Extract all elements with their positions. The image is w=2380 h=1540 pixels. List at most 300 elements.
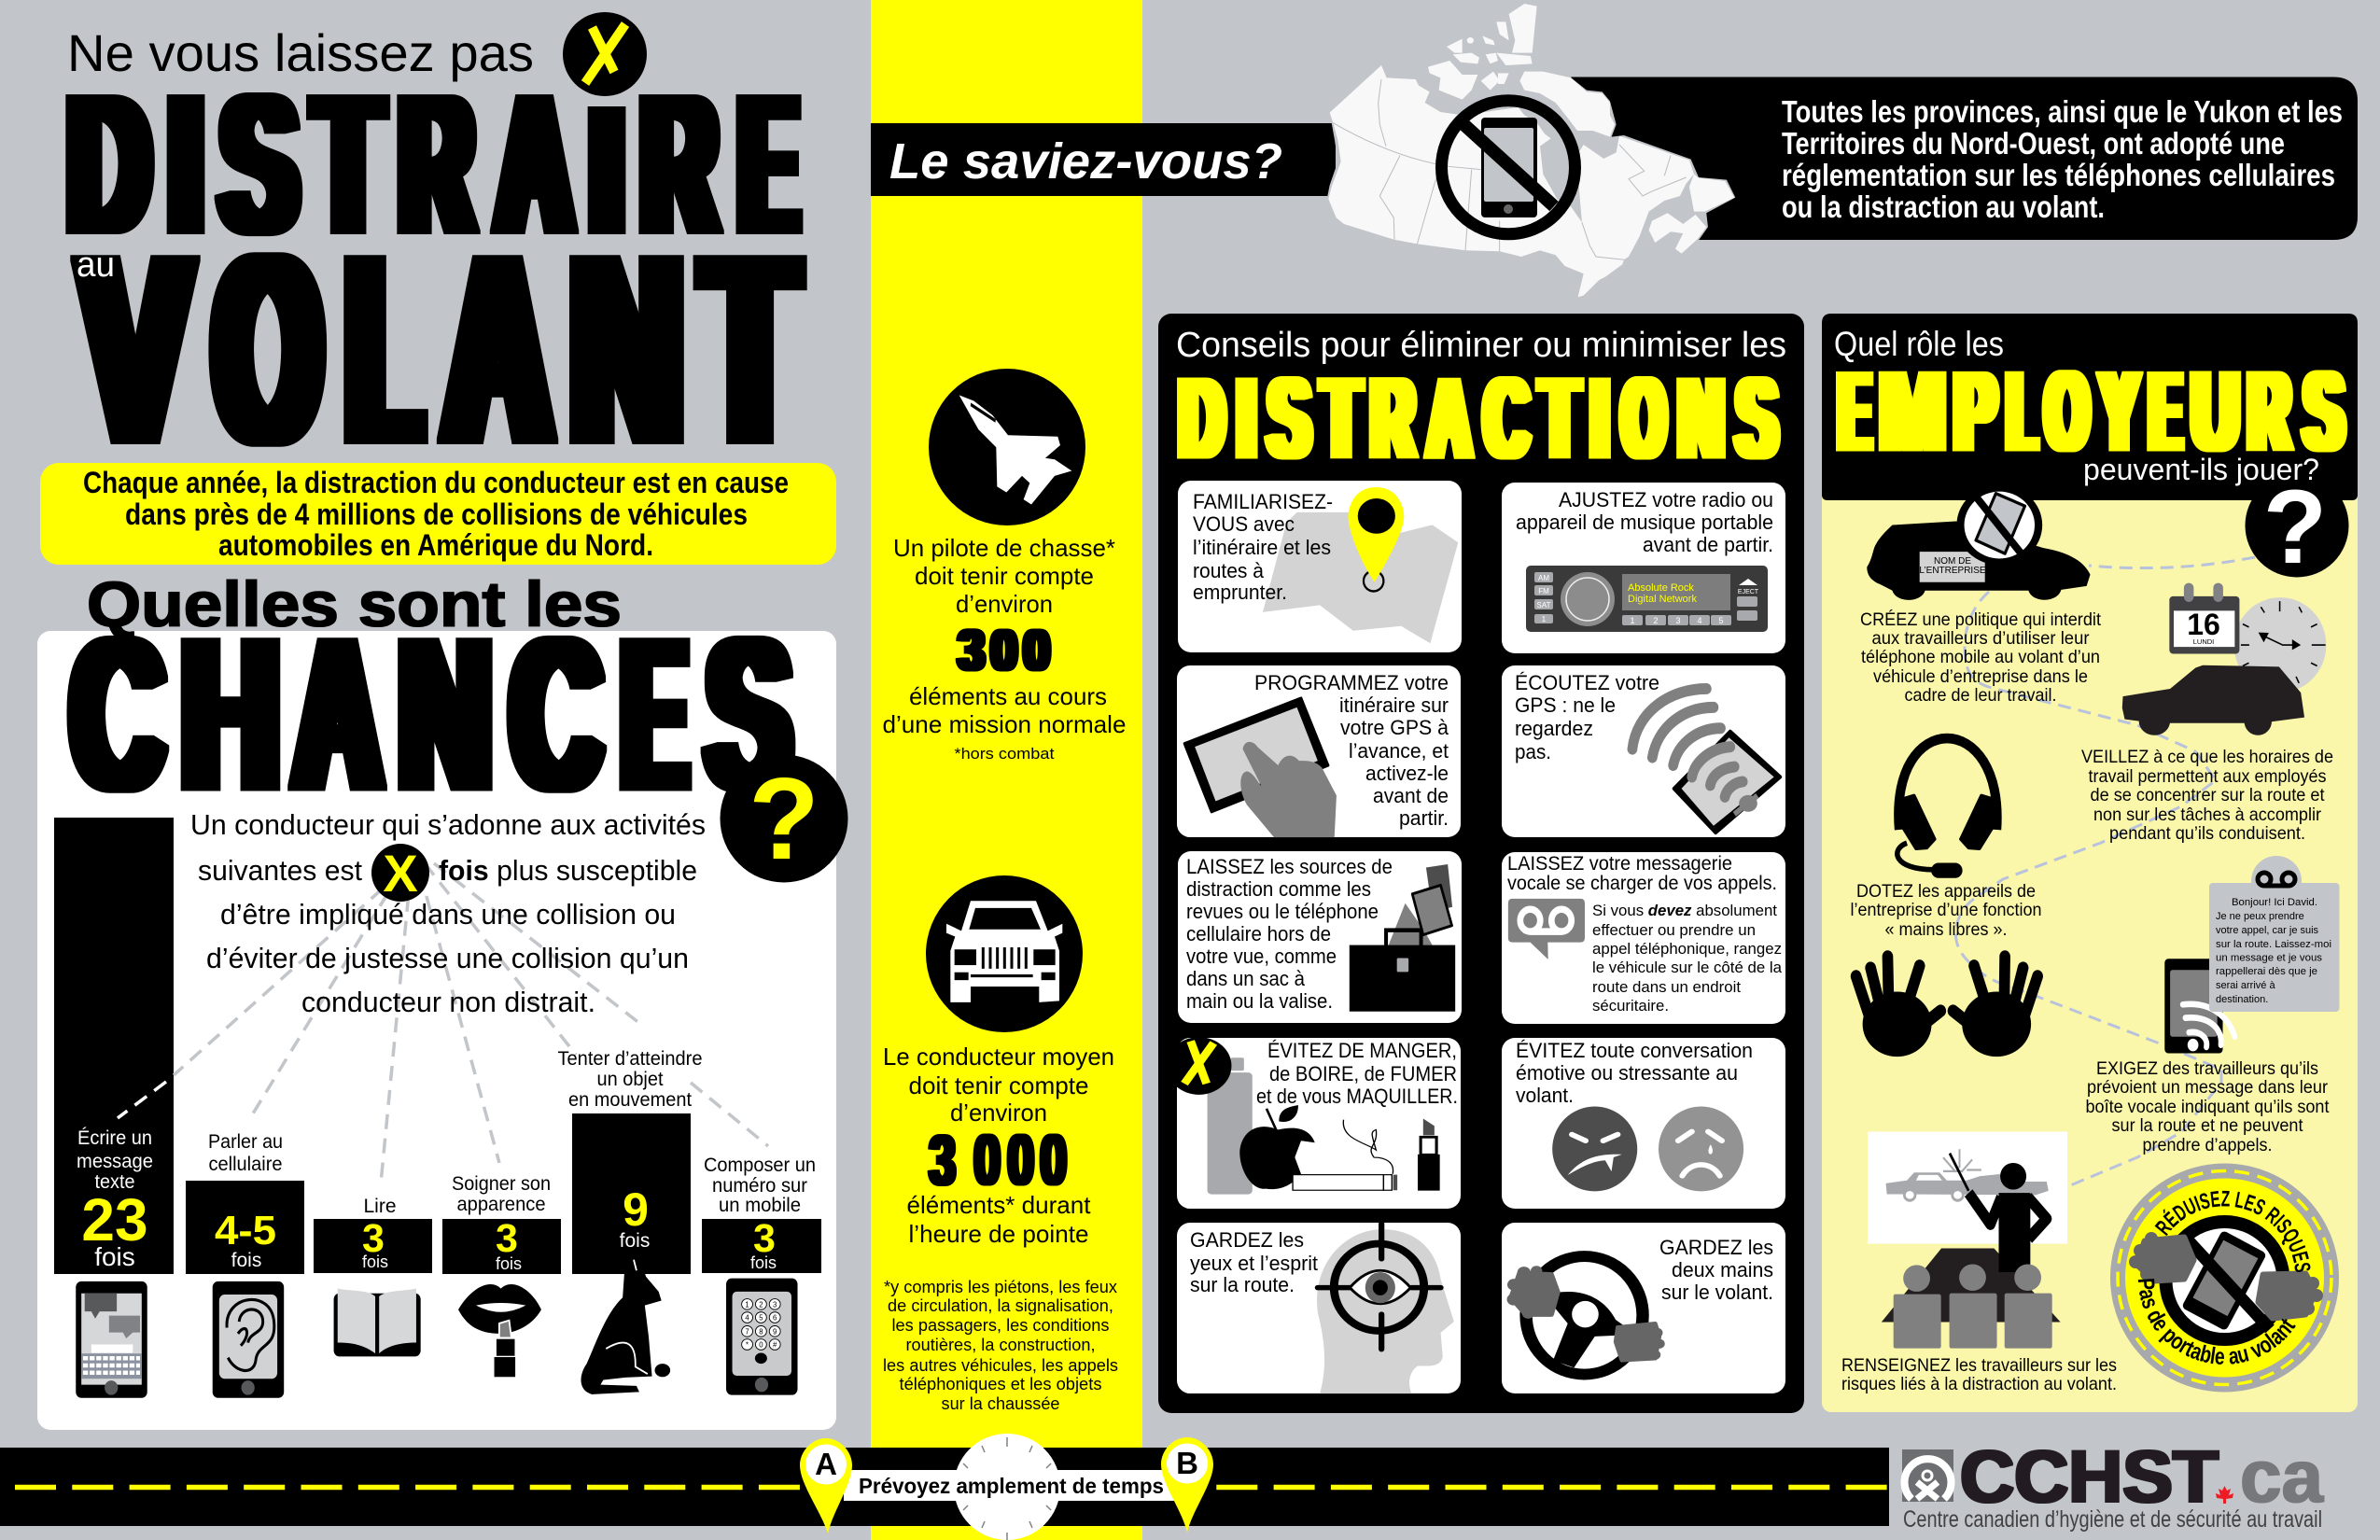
- heading: DISTRACTIONS: I: [1238, 356, 1255, 483]
- icon: no phone symbol: [1441, 101, 1575, 234]
- yellow centre column: [871, 0, 1142, 1540]
- icon: company car: L’ENTREPRISE: [1919, 566, 1986, 576]
- title word: DISTRAIRE: D: [68, 53, 149, 274]
- card: laissez sources: cellulaire hors de: [1186, 922, 1331, 945]
- banner right: [1571, 77, 2358, 240]
- heading: DISTRACTIONS: R: [1371, 356, 1414, 483]
- title word: VOLANT: N: [572, 200, 681, 498]
- heading: EMPLOYEURS: Y: [2101, 347, 2138, 474]
- title word: VOLANT: [82, 200, 795, 498]
- banner left: [871, 123, 1336, 196]
- icon: company car: [1867, 485, 2091, 600]
- heading: Quelles sont les: Quelles sont les: [87, 568, 622, 640]
- label: grooming: [452, 1173, 551, 1273]
- icon: car radio: AM: [1538, 574, 1549, 582]
- bar icons: [76, 1255, 798, 1398]
- road centre dashes: [15, 1485, 1889, 1490]
- card: programmez: [1177, 665, 1461, 837]
- text: renseignez: [1841, 1355, 2117, 1394]
- label: dialing: Composer un: [704, 1155, 816, 1176]
- driver text: Le conducteur moyen: [883, 1043, 1114, 1071]
- icon: company car: NOM DE: [1934, 556, 1971, 567]
- card: evitez manger: et de vous MAQUILLER.: [1256, 1085, 1458, 1108]
- title word: VOLANT: A: [446, 200, 549, 498]
- text: creez: aux travailleurs d’utiliser leur: [1872, 628, 2090, 649]
- heading: EMPLOYEURS: O: [2046, 347, 2088, 474]
- text: veillez: travail permettent aux employés: [2089, 766, 2327, 787]
- icon: keypad phone: 1: [745, 1300, 749, 1309]
- heading: CHANCES: H: [182, 594, 279, 834]
- driver text: [883, 1043, 1114, 1248]
- label: reading: [362, 1196, 397, 1271]
- heading: DISTRACTIONS: T: [1541, 356, 1578, 483]
- icon: phone with signal: [2164, 959, 2234, 1054]
- icon: dog: [581, 1255, 670, 1394]
- footnote: téléphoniques et les objets: [900, 1375, 1101, 1393]
- heading: EMPLOYEURS: [1840, 347, 2344, 474]
- card: ecoutez: GPS : ne le: [1515, 693, 1616, 717]
- card: familiarisez: FAMILIARISEZ-: [1193, 490, 1333, 513]
- text: dotez: DOTEZ les appareils de: [1856, 881, 2036, 902]
- heading: EMPLOYEURS: U: [2191, 347, 2238, 474]
- header background: [1822, 314, 2358, 500]
- text: exigez: [2085, 1058, 2330, 1155]
- footnote: *y compris les piétons, les feux: [884, 1278, 1117, 1296]
- card: gardez mains: [1502, 1223, 1785, 1393]
- gap above the letter I: [581, 82, 633, 106]
- icon: keypad phone: [726, 1279, 798, 1395]
- intro paragraph: suivantes est: [198, 854, 362, 887]
- heading: EMPLOYEURS: E: [2150, 347, 2180, 474]
- plan ahead label: Prévoyez amplement de temps: [859, 1474, 1164, 1498]
- icon: question mark: ?: [2263, 469, 2327, 585]
- heading: EMPLOYEURS: E: [1840, 347, 1869, 474]
- title word: VOLANT: V: [82, 200, 189, 498]
- icon: pin B: B: [1176, 1446, 1198, 1480]
- card: evitez manger: de BOIRE, de FUMER: [1269, 1062, 1457, 1085]
- road surface: [0, 1448, 1889, 1526]
- number: 3 000: 0: [1008, 1121, 1034, 1200]
- number: 300: 0: [1023, 619, 1050, 683]
- number: 3 000: 0: [974, 1121, 1001, 1200]
- pilot text: *hors combat: [954, 745, 1055, 763]
- heading: Quel role les: Quel rôle les: [1834, 325, 2004, 363]
- text: exigez: sur la route et ne peuvent: [2111, 1115, 2303, 1136]
- card: gardez mains: GARDEZ les: [1659, 1236, 1773, 1259]
- icon: two hands: [1856, 957, 2037, 1057]
- text: exigez: EXIGEZ des travailleurs qu’ils: [2096, 1058, 2318, 1079]
- card: familiarisez: emprunter.: [1193, 581, 1287, 604]
- panel background: [1158, 314, 1804, 1413]
- label: reading: Lire: [363, 1196, 397, 1217]
- title word: VOLANT: L: [349, 200, 419, 498]
- heading: DISTRACTIONS: [1180, 356, 1777, 483]
- card: laissez sources: main ou la valise.: [1186, 989, 1333, 1013]
- card: laissez messagerie: LAISSEZ votre messagerie: [1507, 853, 1732, 875]
- heading: Le saviez-vous?: Le saviez-vous?: [889, 133, 1282, 189]
- panel: employers: [1822, 314, 2358, 1412]
- number: 300: [958, 619, 1050, 683]
- card: evitez conversation: ÉVITEZ toute conversation: [1516, 1039, 1753, 1062]
- road band: [0, 1434, 1889, 1540]
- heading: EMPLOYEURS: S: [2304, 347, 2344, 474]
- label: texting: message: [77, 1151, 153, 1172]
- number: 3 000: 3: [930, 1121, 956, 1200]
- callout: yearly collisions: Chaque année, la distraction du conducteur est en cause: [83, 466, 789, 499]
- heading: DISTRACTIONS: O: [1622, 356, 1665, 483]
- heading: EMPLOYEURS: R: [2248, 347, 2289, 474]
- icon: GPS audio waves: [1632, 689, 1780, 833]
- number: 3 000: [930, 1121, 1067, 1200]
- text: creez: [1860, 609, 2102, 706]
- footnote: routières, la construction,: [905, 1336, 1096, 1354]
- voicemail message bubble: destination.: [2216, 994, 2268, 1005]
- card: ajustez: avant de partir.: [1643, 533, 1773, 556]
- map landmass: [1328, 4, 1734, 297]
- card: familiarisez: [1178, 481, 1462, 652]
- footnote: les autres véhicules, les appels: [883, 1356, 1118, 1375]
- card: laissez messagerie: appel téléphonique, rangez: [1592, 940, 1782, 958]
- icon: pin A: [800, 1438, 852, 1533]
- footnote: les passagers, les conditions: [892, 1316, 1109, 1335]
- card: familiarisez: routes à: [1193, 559, 1265, 582]
- number: 3 000: 0: [1040, 1121, 1067, 1200]
- card: gardez mains: sur le volant.: [1661, 1281, 1773, 1304]
- card: evitez conversation: émotive ou stressante au: [1516, 1061, 1738, 1085]
- label: grooming: fois: [496, 1254, 522, 1273]
- text: exigez: prévoient un message dans leur: [2087, 1077, 2328, 1098]
- icon: keypad phone: 5: [759, 1313, 763, 1323]
- label: texting: [77, 1127, 153, 1271]
- card: gardez yeux: sur la route.: [1190, 1273, 1295, 1296]
- icon: steering wheel and fists: [1507, 1256, 1665, 1375]
- icon: car radio: Digital Network: [1628, 594, 1697, 605]
- text: E: [741, 53, 796, 274]
- icon: keypad phone: 9: [773, 1327, 777, 1337]
- icon: car radio: FM: [1538, 587, 1549, 595]
- icon: texting phone: [76, 1281, 147, 1398]
- card: laissez sources: dans un sac à: [1186, 967, 1306, 990]
- title word: VOLANT: O: [217, 200, 319, 498]
- logo icon: [1902, 1449, 1953, 1502]
- heading: CHANCES: C: [72, 594, 162, 834]
- label: grooming: Soigner son: [452, 1173, 551, 1195]
- card: laissez sources: LAISSEZ les sources de: [1186, 855, 1393, 878]
- pilot text: éléments au cours: [909, 682, 1107, 710]
- card: ecoutez: regardez: [1515, 717, 1593, 740]
- voicemail message bubble: [2209, 856, 2339, 1012]
- icon: X inline: [371, 844, 429, 903]
- label: grooming: apparence: [457, 1194, 545, 1215]
- icon: maple leaf: [2216, 1486, 2233, 1504]
- card: laissez messagerie: effectuer ou prendre un: [1592, 921, 1756, 939]
- label: texting: fois: [94, 1242, 135, 1271]
- heading: DISTRACTIONS: A: [1428, 356, 1471, 483]
- driver text: l’heure de pointe: [909, 1220, 1088, 1248]
- card: programmez: l’avance, et: [1349, 739, 1449, 763]
- pilot text: Un pilote de chasse*: [893, 534, 1115, 562]
- card: familiarisez: l’itinéraire et les: [1193, 536, 1331, 559]
- card: familiarisez: VOUS avec: [1193, 512, 1295, 536]
- card: laissez messagerie: le véhicule sur le côté de la: [1592, 959, 1783, 976]
- card: evitez conversation: volant.: [1516, 1084, 1574, 1107]
- legislation text: ou la distraction au volant.: [1782, 189, 2105, 224]
- callout: yearly collisions: [40, 463, 836, 565]
- pilot text: d’environ: [956, 590, 1053, 618]
- icon: angry and sad faces: [1552, 1106, 1743, 1191]
- badge: reduisez les risques: [2110, 1163, 2339, 1393]
- heading: CHANCES: S: [707, 594, 791, 834]
- icon: fighter jet: [929, 369, 1085, 525]
- legislation text: Territoires du Nord-Ouest, ont adopté une: [1782, 126, 2285, 161]
- label: cell phone: 4-5: [215, 1208, 276, 1253]
- icon: keypad phone: 7: [745, 1327, 749, 1337]
- card: laissez messagerie: sécuritaire.: [1592, 997, 1669, 1015]
- heading: DISTRACTIONS: S: [1268, 356, 1310, 483]
- intro paragraph: d’être impliqué dans une collision ou: [220, 898, 676, 931]
- icon: head with target eye: [1317, 1224, 1454, 1393]
- card: gardez yeux: GARDEZ les: [1190, 1228, 1304, 1252]
- panel: le saviez-vous banner: [871, 4, 2358, 297]
- panel: pilot vs driver: [883, 369, 1126, 1413]
- text: creez: CRÉEZ une politique qui interdit: [1860, 609, 2102, 630]
- title word: DISTRAIRE: [68, 53, 796, 274]
- title word: DISTRAIRE: R: [400, 53, 472, 274]
- card: laissez messagerie: [1502, 852, 1785, 1024]
- icon: ear phone: [213, 1281, 284, 1398]
- text: dotez: l’entreprise d’une fonction: [1850, 900, 2042, 920]
- icon: car radio: 4: [1697, 616, 1702, 625]
- pilot text: d’une mission normale: [883, 710, 1126, 738]
- badge: reduisez les risques: Pas de portable au volant: [2137, 1279, 2296, 1365]
- icon: clock face: [954, 1434, 1060, 1540]
- number: 300: 3: [958, 619, 985, 683]
- card: ecoutez: [1502, 665, 1785, 837]
- label: dialing: 3: [753, 1216, 776, 1261]
- footnote: sur la chaussée: [941, 1394, 1060, 1413]
- icon: briefcase with phone: [1350, 864, 1455, 1012]
- title line: Ne vous laissez pas: Ne vous laissez pas: [67, 23, 534, 82]
- icon: keypad phone: #: [773, 1340, 777, 1350]
- heading: CHANCES: [72, 594, 791, 834]
- label: texting: texte: [95, 1171, 134, 1193]
- heading: DISTRACTIONS: D: [1180, 356, 1225, 483]
- icon: car radio: 2: [1653, 616, 1659, 625]
- intro paragraph: fois plus susceptible: [439, 854, 697, 887]
- card: laissez sources: [1178, 851, 1462, 1023]
- voicemail message bubble: Bonjour! Ici David.: [2232, 897, 2317, 908]
- card: laissez messagerie: vocale se charger de vos appels.: [1507, 873, 1777, 894]
- heading: EMPLOYEURS: M: [1880, 347, 1945, 474]
- icon: car front: [926, 875, 1083, 1032]
- text: renseignez: risques liés à la distraction au volant.: [1841, 1374, 2117, 1394]
- legislation text: [1782, 94, 2343, 224]
- heading: CHANCES: E: [623, 594, 685, 834]
- card: laissez sources: distraction comme les: [1186, 877, 1371, 901]
- icon: food, smoke and makeup: [1167, 1037, 1440, 1195]
- label: grooming: 3: [496, 1216, 518, 1261]
- card: programmez: activez-le: [1365, 762, 1449, 785]
- text: veillez: de se concentrer sur la route et: [2091, 785, 2325, 805]
- label: reaching: en mouvement: [568, 1089, 692, 1111]
- map coastal fringe: [1327, 77, 1735, 268]
- icon: clock, calendar and SUV: [2122, 583, 2326, 735]
- icon: car radio: [1526, 566, 1768, 632]
- heading line: Conseils pour éliminer ou minimiser les: [1176, 326, 1786, 365]
- text: veillez: [2081, 747, 2333, 844]
- icon: question mark circle: ?: [749, 755, 819, 884]
- label: cell phone: [208, 1131, 283, 1271]
- icon: keypad phone: 8: [759, 1327, 763, 1337]
- label: dialing: [704, 1155, 816, 1272]
- icon: keypad phone: 4: [745, 1313, 749, 1323]
- icon: car radio: 5: [1718, 616, 1724, 625]
- number: 300: 0: [991, 619, 1017, 683]
- icon: pin A: A: [815, 1447, 837, 1481]
- dashed route lines: [1955, 557, 2255, 1186]
- label: cell phone: cellulaire: [209, 1154, 282, 1175]
- logo: CCHST: [1902, 1435, 2324, 1533]
- icon: car radio: 1: [1542, 615, 1547, 623]
- footnote: [883, 1278, 1118, 1413]
- intro paragraph: [190, 808, 706, 1018]
- driver text: d’environ: [950, 1099, 1047, 1127]
- text: creez: cadre de leur travail.: [1904, 685, 2057, 706]
- icon: book: [334, 1289, 421, 1356]
- title block: [67, 12, 796, 498]
- title word: DISTRAIRE: I: [590, 53, 623, 274]
- text: veillez: pendant qu’ils conduisent.: [2109, 823, 2305, 844]
- callout: yearly collisions: automobiles en Amérique du Nord.: [218, 528, 653, 562]
- text: veillez: non sur les tâches à accomplir: [2093, 805, 2321, 825]
- icon: car radio: SAT: [1537, 601, 1551, 609]
- card: ecoutez: ÉCOUTEZ votre: [1515, 671, 1659, 694]
- text: creez: véhicule d’entreprise dans le: [1873, 666, 2088, 687]
- logo wordmark: CCHST: [1960, 1435, 2219, 1518]
- text: exigez: prendre d’appels.: [2143, 1135, 2272, 1155]
- icon: keypad phone: 0: [759, 1340, 763, 1350]
- text: dotez: [1850, 881, 2042, 940]
- panel: distractions: [1158, 314, 1804, 1413]
- title word: DISTRAIRE: R: [642, 53, 716, 274]
- logo suffix: ca: [2240, 1435, 2324, 1518]
- icon: X circle: [563, 12, 647, 96]
- title word: DISTRAIRE: T: [315, 53, 381, 274]
- heading: CHANCES: C: [511, 594, 600, 834]
- panel background: [37, 631, 836, 1430]
- card: gardez yeux: [1177, 1223, 1461, 1393]
- card: programmez: itinéraire sur: [1339, 693, 1449, 717]
- icon: keypad phone: *: [746, 1340, 749, 1350]
- card: ajustez: [1502, 483, 1785, 653]
- icon: pin B: [1161, 1437, 1213, 1533]
- title word: DISTRAIRE: A: [497, 53, 571, 274]
- card: ecoutez: pas.: [1515, 740, 1551, 763]
- title word: DISTRAIRE: I: [169, 53, 203, 274]
- intro paragraph: Un conducteur qui s’adonne aux activités: [190, 808, 706, 841]
- card: programmez: partir.: [1399, 806, 1449, 830]
- icon: question mark: [2246, 469, 2348, 585]
- title word: VOLANT: T: [705, 200, 795, 498]
- card: programmez: votre GPS à: [1340, 716, 1449, 739]
- icon: training session: [1868, 1131, 2067, 1349]
- text: creez: téléphone mobile au volant d’un: [1861, 647, 2100, 667]
- label: reading: fois: [362, 1253, 388, 1271]
- card: laissez messagerie: route dans un endroit: [1592, 978, 1741, 996]
- heading: peuvent-ils jouer: peuvent-ils jouer?: [2083, 453, 2319, 486]
- voicemail message bubble: rappellerai dès que je: [2216, 966, 2317, 977]
- label: reaching: [558, 1048, 702, 1252]
- card: evitez manger: ÉVITEZ DE MANGER,: [1267, 1039, 1457, 1062]
- title word: au: au: [77, 245, 115, 285]
- heading: EMPLOYEURS: L: [2009, 347, 2036, 474]
- voicemail message bubble: Je ne peux prendre: [2216, 911, 2304, 922]
- intro paragraph: conducteur non distrait.: [301, 986, 595, 1018]
- icon: car radio: Absolute Rock: [1628, 582, 1694, 594]
- card: gardez mains: deux mains: [1672, 1258, 1773, 1281]
- icon: car radio: 3: [1675, 616, 1681, 625]
- heading: CHANCES: A: [295, 594, 380, 834]
- title word: DISTRAIRE: S: [221, 53, 297, 274]
- icon: map of Canada: [1327, 4, 1735, 297]
- text: exigez: boîte vocale indiquant qu’ils sont: [2085, 1097, 2330, 1117]
- icon: headset: [1897, 738, 1998, 878]
- label: dialing: numéro sur: [712, 1175, 807, 1197]
- icon: car radio: 1: [1630, 616, 1635, 625]
- dashed connector lines: [118, 863, 768, 1183]
- label: texting: 23: [81, 1186, 148, 1253]
- card: programmez: avant de: [1373, 784, 1449, 807]
- icon: voicemail bubble: [1508, 899, 1585, 959]
- intro paragraph: d’éviter de justesse une collision qu’un: [206, 942, 689, 974]
- driver text: éléments* durant: [907, 1191, 1091, 1219]
- text: dotez: « mains libres ».: [1885, 919, 2007, 940]
- heading: EMPLOYEURS: P: [1954, 347, 1995, 474]
- pilot text: [883, 534, 1126, 763]
- card: evitez manger: [1167, 1037, 1461, 1209]
- callout: yearly collisions: dans près de 4 millions de collisions de véhicules: [125, 497, 748, 531]
- bar chart: [54, 818, 821, 1274]
- bar labels: [77, 1048, 816, 1273]
- pilot text: doit tenir compte: [915, 562, 1094, 590]
- footnote: de circulation, la signalisation,: [888, 1296, 1113, 1315]
- label: texting: Écrire un: [77, 1127, 152, 1149]
- card: evitez conversation: [1502, 1038, 1785, 1209]
- voicemail message bubble: votre appel, car je suis: [2216, 925, 2319, 936]
- text: veillez: VEILLEZ à ce que les horaires de: [2081, 747, 2333, 767]
- icon: keypad phone: 3: [773, 1300, 777, 1309]
- icon: keypad phone: 2: [759, 1300, 763, 1309]
- heading: DISTRACTIONS: N: [1679, 356, 1723, 483]
- label: cell phone: Parler au: [208, 1131, 283, 1153]
- label: dialing: un mobile: [719, 1195, 801, 1216]
- label: reaching: 9: [623, 1183, 649, 1236]
- label: reaching: un objet: [597, 1069, 664, 1090]
- heading: DISTRACTIONS: T: [1323, 356, 1360, 483]
- icon: keypad phone: 6: [773, 1313, 777, 1323]
- heading: DISTRACTIONS: I: [1591, 356, 1608, 483]
- voicemail message bubble: sur la route. Laissez-moi: [2216, 939, 2331, 950]
- card: ajustez: appareil de musique portable: [1516, 511, 1773, 534]
- icon: clock, calendar and SUV: LUNDI: [2193, 637, 2214, 646]
- driver text: doit tenir compte: [909, 1071, 1088, 1099]
- heading: CHANCES: N: [399, 594, 491, 834]
- icon: lips and lipstick: [458, 1284, 541, 1377]
- card: laissez sources: votre vue, comme: [1186, 945, 1337, 968]
- label: dialing: fois: [750, 1253, 777, 1272]
- card: programmez: PROGRAMMEZ votre: [1254, 671, 1449, 694]
- card: laissez messagerie: Si vous devez absolument: [1592, 902, 1777, 919]
